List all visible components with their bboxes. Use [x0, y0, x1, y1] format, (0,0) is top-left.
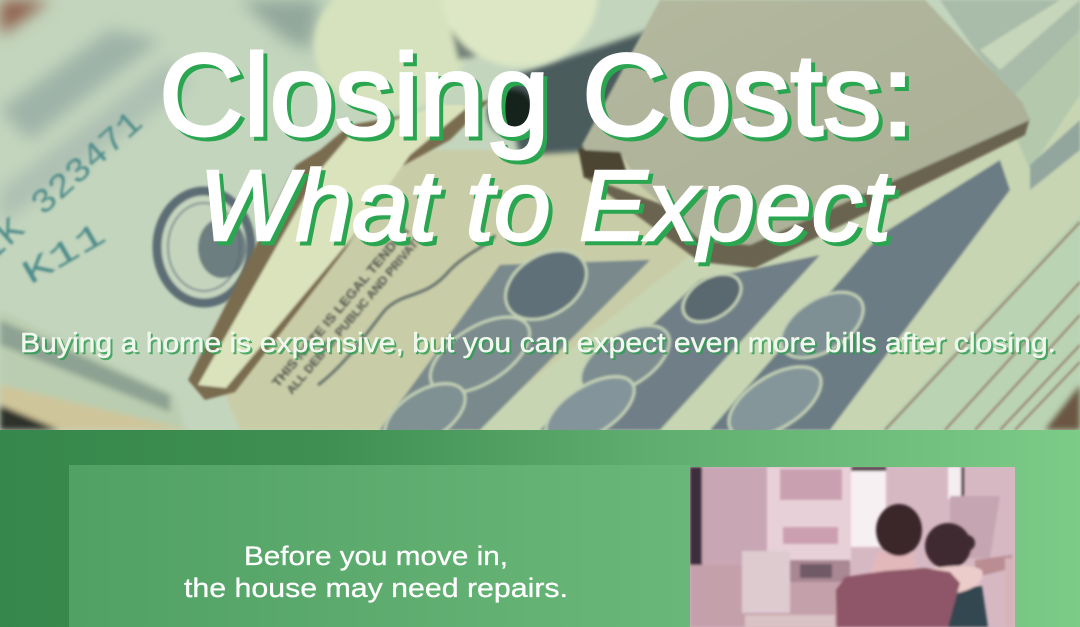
panel text: before you move in: Before you move in,: [244, 541, 508, 571]
icon: wooden house keychain: [578, 0, 1030, 268]
subtitle: Buying a home is expensive, but you can expect even more bills after closing.: [22, 329, 1058, 360]
background: blurred upper bills: [0, 0, 320, 225]
title line 1: Closing Costs: Closing Costs:: [163, 34, 918, 164]
window: [851, 467, 886, 547]
text: bill legal tender wording: ALL DEBTS, PUBLIC AND PRIVATE: [284, 231, 426, 397]
panel text: before you move in: [184, 541, 568, 603]
icon: federal reserve seal: [157, 191, 251, 303]
whiteboard wall: [767, 467, 851, 562]
icon: signature: [318, 235, 495, 385]
title line 2: What to Expect: What to Expect: [199, 150, 895, 262]
bottom-right dark edge: [1045, 385, 1080, 430]
panel: repairs: [69, 465, 690, 627]
icon: banknote portrait ovals: [382, 250, 866, 430]
green section background: [0, 430, 1080, 627]
bottom-left bill edge: [0, 310, 190, 430]
brown edges of stacked bills: [885, 222, 1080, 430]
right-hand stack of bills: [380, 0, 1080, 430]
man neck: [870, 552, 918, 575]
text: bill legal tender wording: THIS NOTE IS LEGAL TENDER: [269, 223, 412, 390]
man hair: [876, 504, 922, 556]
icon: left bill serial numbers: K11: [16, 217, 113, 295]
room left wall and window: [690, 467, 702, 567]
panel text: before you move in: the house may need repairs.: [184, 573, 568, 603]
title: [159, 30, 918, 266]
subtitle: Buying a home is expensive, but you can expect even more bills after closing.: [20, 327, 1056, 358]
man arm: [925, 566, 983, 593]
title line 2: What to Expect: What to Expect: [203, 154, 899, 266]
leaning board: [950, 496, 1000, 558]
center tan bill: [225, 150, 700, 430]
small window: [948, 467, 963, 499]
table: [975, 555, 1012, 575]
man shirt: [836, 568, 960, 627]
hero photo: money and house key: [0, 0, 1080, 459]
photo: couple viewing renovation: [690, 467, 1015, 627]
title line 1: Closing Costs: Closing Costs:: [159, 30, 914, 160]
block: [742, 551, 790, 613]
icon: key shaft: [188, 100, 490, 400]
dark gap behind keys: [488, 30, 650, 155]
floor: [690, 565, 840, 627]
icon: key heads: [314, 0, 598, 113]
woman: [940, 586, 988, 627]
man and woman figures: [836, 504, 988, 627]
panel background: [69, 465, 690, 627]
